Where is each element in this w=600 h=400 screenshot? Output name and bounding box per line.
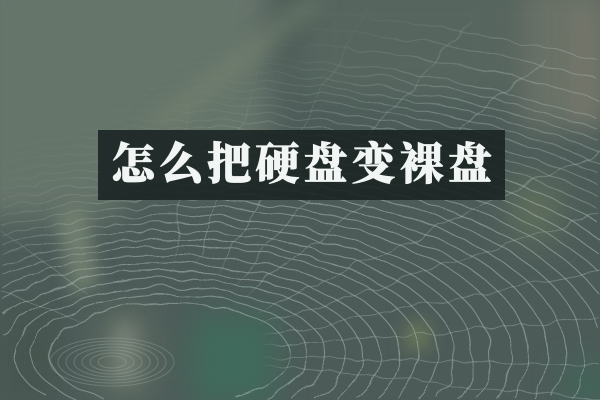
- title: 怎么把硬盘变裸盘: [111, 140, 496, 189]
- title band: [98, 130, 505, 200]
